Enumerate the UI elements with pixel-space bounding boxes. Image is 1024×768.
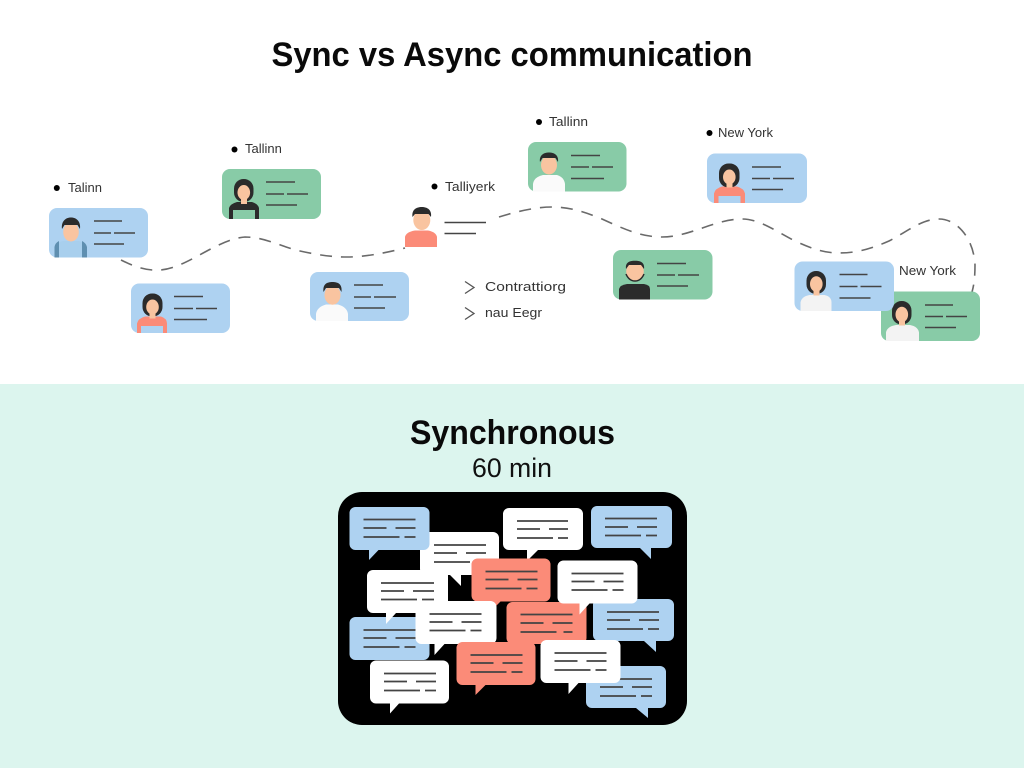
card: blue woman white shirt <box>794 262 894 311</box>
dashed timeline path <box>121 207 975 292</box>
location label: Talliyerk: Talliyerk <box>445 179 496 194</box>
bubble: salmon <box>456 642 536 695</box>
legend item: Contrattiorg <box>465 279 566 294</box>
location label: Tallinn: Tallinn <box>245 141 282 156</box>
card: Tallinn blue man <box>49 208 148 258</box>
panel: synchronous background <box>0 384 1024 768</box>
card: New York green woman <box>881 292 980 341</box>
bubble: white <box>503 508 583 561</box>
location label: New York top: New York <box>718 125 773 140</box>
bubble: blue <box>350 617 430 660</box>
card: blue man white shirt <box>310 272 409 321</box>
subheading: 60 min: 60 min <box>472 453 552 483</box>
bubble: white <box>558 560 638 614</box>
bubble: blue <box>586 666 666 718</box>
chat panel <box>338 492 687 725</box>
legend item: Contrattiorg: Contrattiorg <box>485 279 566 294</box>
heading: Synchronous: Synchronous <box>410 414 615 452</box>
card: Tallinn green woman <box>222 169 321 219</box>
bubble: blue <box>591 506 672 559</box>
card: New York blue woman <box>707 154 807 203</box>
bubble: white <box>420 532 499 586</box>
standalone person with text lines <box>405 207 486 247</box>
bubble: salmon <box>506 602 586 644</box>
legend item: nau Eegr <box>465 305 543 320</box>
bubble: white <box>370 660 449 714</box>
location label: Talinn: Talinn <box>68 180 102 195</box>
bubble: white <box>367 570 448 624</box>
location label: Tallinn top: Tallinn <box>549 114 588 129</box>
bubble: blue <box>593 599 674 652</box>
bubble: salmon <box>472 558 550 610</box>
bubble: white <box>540 640 620 694</box>
legend item: nau Eegr: nau Eegr <box>485 305 543 320</box>
card: Tallinn green man <box>528 142 626 192</box>
title: Sync vs Async communication <box>272 36 752 74</box>
card: blue woman lower <box>131 284 230 333</box>
bubble: white <box>416 601 496 655</box>
bubble: blue <box>350 507 430 560</box>
location label: New York lower: New York <box>899 263 957 278</box>
card: green man dark shirt <box>613 250 712 300</box>
